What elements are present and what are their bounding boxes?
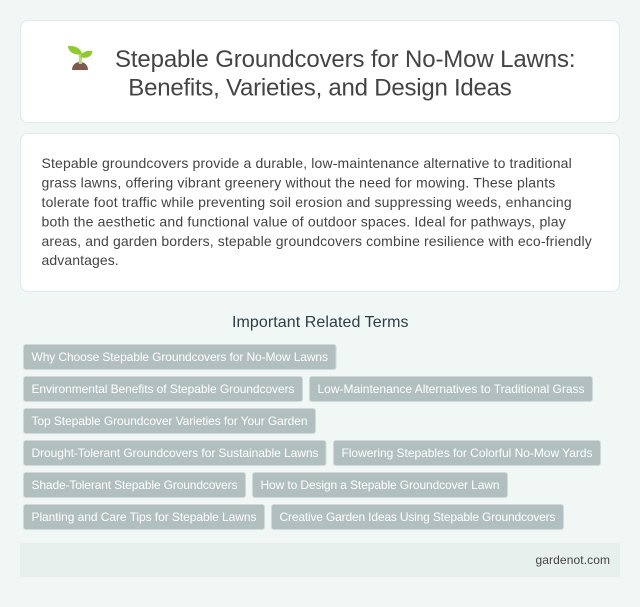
tag: low-maintenance: Low-Maintenance Alternatives to Traditional Grass (318, 382, 584, 396)
tag: flowering stepables: Flowering Stepables for Colorful No-Mow Yards (342, 446, 592, 460)
text block: introduction paragraph (42, 155, 592, 268)
tag: how to design: How to Design a Stepable Groundcover Lawn (260, 478, 500, 492)
tag: drought-tolerant (24, 440, 326, 466)
tag: shade-tolerant (24, 472, 246, 498)
text block: introduction paragraph: areas, and garden borders, stepable groundcovers combine resilience with eco-friendly (42, 233, 592, 249)
icon: seedling (68, 46, 92, 70)
title: Benefits, Varieties, and Design Ideas (128, 74, 512, 102)
panel: title card (20, 20, 620, 122)
text block: introduction paragraph: both the aesthetic and functional value of outdoor spaces. Ideal for pathways, play (42, 213, 566, 229)
tag list: related terms (24, 344, 600, 530)
tag: why choose (24, 344, 336, 370)
tag: environmental benefits (24, 376, 302, 402)
tag: planting and care: Planting and Care Tips for Stepable Lawns (32, 510, 256, 524)
tag: low-maintenance (310, 376, 592, 402)
tag: how to design (252, 472, 508, 498)
tag: why choose: Why Choose Stepable Groundcovers for No-Mow Lawns (32, 350, 328, 364)
text block: introduction paragraph: advantages. (42, 252, 119, 268)
tag: flowering stepables (334, 440, 600, 466)
heading: related terms: Important Related Terms (232, 314, 408, 331)
tag: shade-tolerant: Shade-Tolerant Stepable Groundcovers (32, 478, 238, 492)
tag: drought-tolerant: Drought-Tolerant Groundcovers for Sustainable Lawns (32, 446, 318, 460)
tag: top varieties: Top Stepable Groundcover Varieties for Your Garden (32, 414, 308, 428)
tag: planting and care (24, 504, 264, 530)
footer source text: gardenot.com (536, 553, 610, 567)
tag: environmental benefits: Environmental Benefits of Stepable Groundcovers (32, 382, 294, 396)
text block: introduction paragraph: tolerate foot traffic while preventing soil erosion and suppressing weeds, enhancing (42, 194, 572, 210)
tag: top varieties (24, 408, 316, 434)
text block: introduction paragraph: grass lawns, offering vibrant greenery without the need for mowing. These plants (42, 174, 555, 190)
tag: creative garden ideas (272, 504, 564, 530)
panel: introduction (20, 134, 620, 292)
tag: creative garden ideas: Creative Garden Ideas Using Stepable Groundcovers (280, 510, 556, 524)
title (115, 46, 576, 102)
footer (20, 543, 620, 577)
title: Stepable Groundcovers for No-Mow Lawns: (115, 46, 576, 73)
text block: introduction paragraph: Stepable groundcovers provide a durable, low-maintenance alternative to traditional (42, 155, 572, 171)
